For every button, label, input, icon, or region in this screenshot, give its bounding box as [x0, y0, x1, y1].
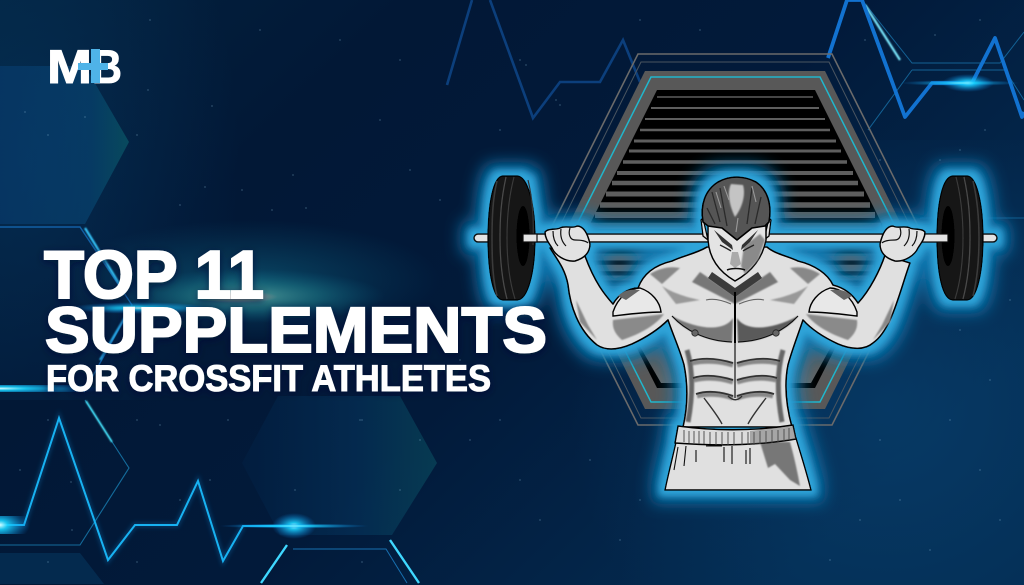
logo: M — [47, 40, 92, 93]
ECG line: top right — [828, 0, 1024, 117]
right weight plate — [920, 176, 983, 300]
weightlifter illustration — [474, 176, 997, 490]
muscle shading — [576, 267, 894, 424]
background hexagons — [0, 66, 437, 584]
pants — [665, 425, 811, 490]
waistband — [675, 425, 796, 445]
left fist — [545, 226, 590, 261]
torso and arms — [550, 247, 910, 427]
ECG line: bottom left — [0, 302, 460, 561]
right fist — [880, 226, 925, 261]
title: TOP 11 — [44, 237, 264, 313]
logo: B — [92, 40, 122, 93]
title: FOR CROSSFIT ATHLETES — [46, 358, 491, 399]
ECG line: top centre — [447, 0, 640, 118]
barbell — [474, 176, 997, 300]
bar — [474, 234, 997, 242]
left weight plate — [488, 176, 537, 300]
black inner panel with stripes — [582, 90, 890, 388]
logo — [47, 40, 122, 93]
head — [701, 177, 771, 281]
icon: plus sign — [78, 49, 108, 83]
title: SUPPLEMENTS — [45, 294, 547, 366]
title — [44, 237, 547, 399]
nebula glow behind title — [60, 220, 440, 340]
hexagon frame — [545, 54, 925, 425]
